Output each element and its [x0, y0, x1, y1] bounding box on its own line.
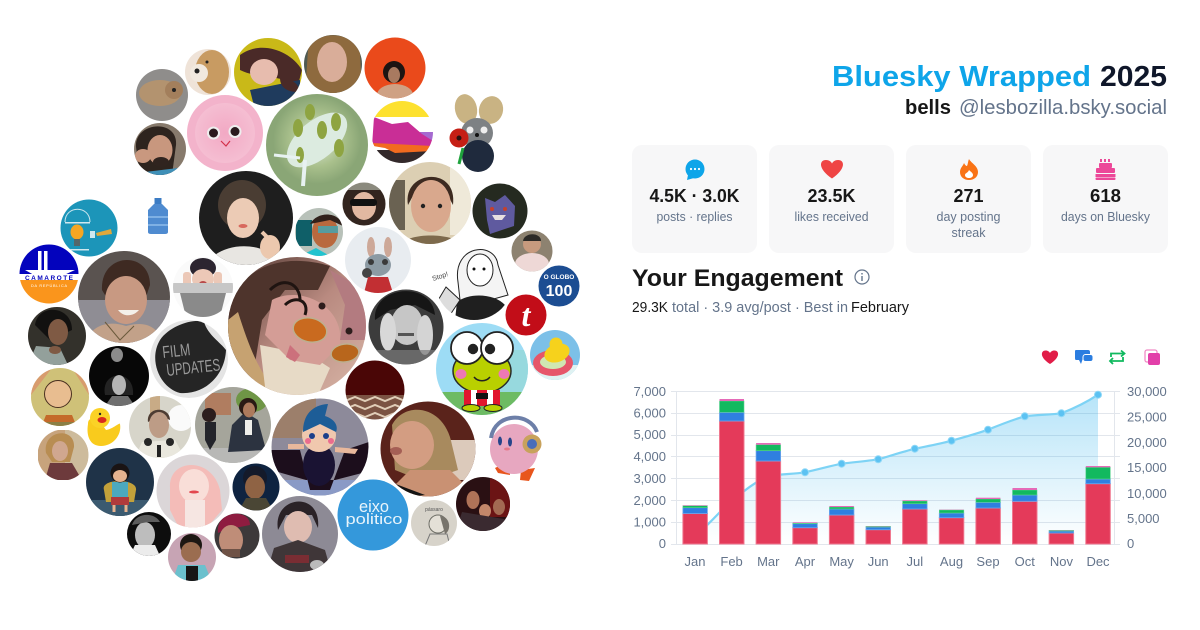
avatar: man on dark blue — [232, 463, 280, 512]
avatar: eixo politico logo: eixo — [359, 497, 389, 516]
grid lines — [671, 391, 1120, 544]
avatar: man with headphones — [129, 396, 194, 458]
engagement summary: 29.3K — [632, 300, 668, 316]
engagement summary: total · 3.9 avg/post · Best in — [672, 300, 848, 316]
avatar: screaming kid — [173, 257, 233, 317]
avatar: pikachu on float ring — [530, 330, 580, 380]
avatar: t logo: t — [522, 297, 532, 333]
avatar: person in sunglasses — [342, 180, 386, 226]
month labels: Dec — [1086, 554, 1110, 569]
chart: monthly engagement — [633, 384, 1167, 569]
avatar: black and white man with owl — [89, 346, 149, 406]
panel: likes received — [769, 145, 894, 253]
month labels: Mar — [757, 554, 780, 569]
avatar: o globo 100 — [538, 266, 580, 306]
avatar: eixo politico logo — [338, 480, 408, 550]
avatar: cartoon girl drinking — [439, 249, 509, 320]
cumulative line — [695, 395, 1098, 535]
panel: day posting streak: streak — [952, 226, 986, 240]
avatar: gengar — [472, 183, 528, 239]
right axis labels: 5,000 — [1127, 511, 1160, 526]
left axis labels: 4,000 — [633, 449, 666, 464]
month labels: Nov — [1050, 554, 1073, 569]
avatar: pink-haired woman — [156, 454, 230, 530]
user handle: bells — [905, 97, 951, 119]
avatar: pink cotton candy face — [185, 93, 265, 173]
month labels: May — [829, 554, 854, 569]
avatar: water jug — [148, 198, 168, 234]
left axis labels: 2,000 — [633, 493, 666, 508]
stacked bars: quotes — [683, 399, 1110, 530]
avatar: man in pink shirt — [512, 230, 552, 272]
icon: flame — [960, 159, 978, 180]
title: 2025 — [1100, 61, 1167, 93]
avatar: kamala harris photo — [195, 387, 271, 464]
icon: cake — [1096, 159, 1116, 180]
right axis labels: 10,000 — [1127, 486, 1167, 501]
right axis labels: 25,000 — [1127, 410, 1167, 424]
avatar: person with curly blonde hair — [38, 430, 89, 480]
avatar: main woman with orange glasses — [228, 257, 366, 395]
avatar: man selfie — [389, 162, 472, 246]
avatar: man on orange — [364, 38, 426, 98]
panel: day posting streak — [906, 145, 1031, 253]
avatar: o globo 100: O GLOBO — [544, 274, 574, 281]
icon: quotes — [1145, 350, 1160, 365]
icon: replies — [1075, 350, 1093, 364]
panel: days on Bluesky — [1043, 145, 1168, 253]
panel: posts and replies — [632, 145, 757, 253]
avatar: golden dog — [185, 49, 231, 95]
avatar: smiling man in teal shirt — [168, 533, 216, 582]
month labels: Apr — [795, 554, 816, 569]
avatar: black and white portrait hands — [368, 289, 444, 366]
left axis labels: 6,000 — [633, 406, 666, 420]
avatar: pencil sketch — [411, 500, 457, 546]
avatar: laughing young man — [78, 251, 170, 345]
panel: likes received: likes received — [794, 210, 869, 224]
left axis labels: 7,000 — [633, 384, 666, 399]
avatar: camarote da republica logo: DA REPÚBLICA — [31, 283, 67, 288]
panel: likes received: 23.5K — [808, 186, 856, 206]
avatar: hamster — [136, 69, 188, 121]
stacked bars: replies — [683, 412, 1110, 533]
avatar: luffy — [86, 448, 154, 516]
avatar: eixo politico logo: politico — [346, 511, 402, 528]
avatar: kewpie doll with bat wings — [271, 398, 369, 497]
avatar: green nudibranch — [265, 93, 369, 197]
avatar cluster — [19, 33, 580, 582]
avatar: gas mask rabbit — [345, 227, 411, 293]
avatar: t logo — [506, 294, 546, 336]
avatar: camarote da republica logo — [19, 244, 79, 305]
avatar: keroppi frog — [436, 323, 530, 416]
panel: days on Bluesky: days on Bluesky — [1061, 210, 1151, 224]
avatar: film updates logo — [150, 320, 228, 398]
avatar: film updates logo: FILM — [161, 340, 191, 362]
avatar: bearded man resting head — [134, 123, 186, 175]
icon: chat bubble — [686, 160, 704, 180]
avatar: family movie poster — [456, 477, 510, 531]
right axis labels: 30,000 — [1127, 384, 1167, 399]
left axis labels: 5,000 — [633, 427, 666, 442]
user handle: @lesbozilla.bsky.social — [959, 97, 1167, 119]
left axis labels: 3,000 — [633, 471, 666, 486]
engagement summary — [632, 300, 910, 316]
panel: days on Bluesky: 618 — [1090, 186, 1121, 206]
title: Bluesky Wrapped — [832, 61, 1091, 93]
month labels: Jan — [685, 554, 705, 569]
icon: heart — [821, 160, 843, 178]
avatar: curly-haired girl pointing — [199, 171, 293, 268]
avatar: blonde woman kissing — [380, 401, 478, 500]
month labels: Oct — [1015, 554, 1035, 569]
month labels: Feb — [720, 554, 743, 569]
avatar: woman on yellow — [234, 38, 302, 106]
right axis labels: 20,000 — [1127, 435, 1167, 450]
icon: info — [855, 270, 869, 284]
icon: reposts — [1110, 350, 1124, 364]
month labels: Aug — [940, 554, 963, 569]
month labels — [685, 554, 1110, 569]
avatar: kirby with headphones — [490, 418, 542, 481]
engagement summary: February — [851, 300, 910, 316]
panel: day posting streak: day posting — [936, 210, 1001, 224]
right axis labels: 0 — [1127, 536, 1134, 551]
stacked bars: likes — [683, 421, 1110, 544]
legend icons — [1042, 350, 1160, 365]
right axis labels: 15,000 — [1127, 460, 1167, 475]
avatar: felt mouse with poppy — [450, 92, 506, 172]
right axis labels — [1127, 384, 1167, 551]
avatar: black and white woman — [127, 512, 171, 556]
icon: likes — [1042, 350, 1058, 364]
label: stop sketch: Stop! — [431, 271, 449, 283]
avatar: red-haired woman — [304, 35, 362, 93]
avatar: rubber duck — [88, 408, 120, 446]
avatar: pencil sketch: pássaro — [425, 507, 443, 513]
avatar: o globo 100: 100 — [546, 283, 572, 300]
left axis labels — [633, 384, 666, 551]
avatar: twin peaks red room — [345, 360, 405, 421]
left axis labels: 0 — [659, 536, 666, 551]
month labels: Sep — [976, 554, 1000, 569]
avatar: film updates logo: UPDATES — [165, 355, 221, 380]
avatar: charlie brown — [31, 368, 89, 426]
avatar: woman thinking in dark — [28, 307, 86, 365]
avatar: pink loafer — [372, 101, 433, 163]
month labels: Jul — [906, 554, 923, 569]
panel: day posting streak: 271 — [954, 186, 984, 206]
avatar: man with red hair — [214, 513, 260, 559]
stacked bars: reposts — [683, 401, 1110, 531]
heading: your engagement: Your Engagement — [632, 265, 843, 292]
panel: posts and replies: posts · replies — [656, 210, 732, 224]
panel: posts and replies: 4.5K · 3.0K — [650, 186, 740, 206]
avatar: camarote da republica logo: CAMAROTE — [25, 275, 74, 282]
cumulative area — [695, 395, 1098, 544]
avatar: young man eating — [262, 496, 338, 575]
month labels: Jun — [868, 554, 889, 569]
avatar: man with teal glasses — [295, 208, 343, 256]
cumulative points — [802, 391, 1102, 476]
left axis labels: 1,000 — [633, 514, 666, 530]
avatar: lightbulb in cage — [60, 199, 118, 257]
